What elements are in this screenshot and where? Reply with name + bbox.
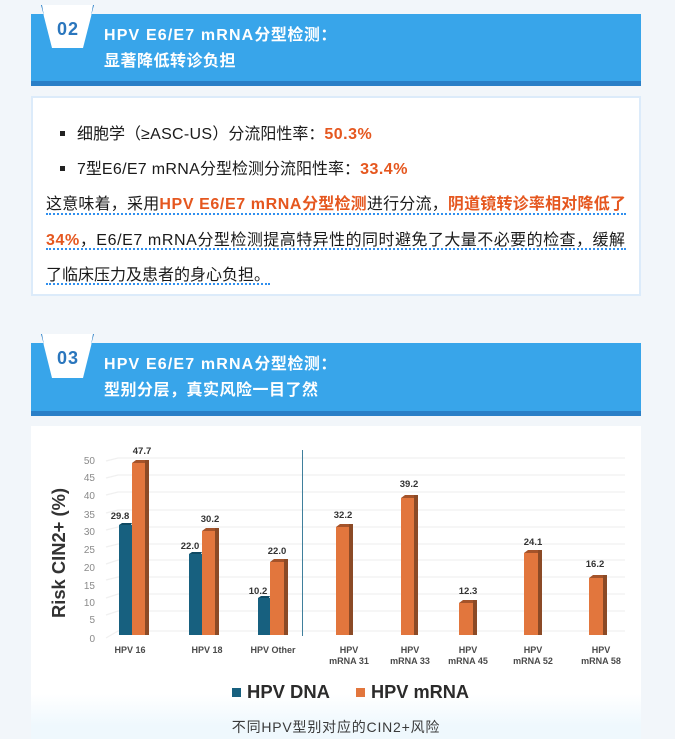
y axis ticks: 15 xyxy=(84,581,95,592)
category labels: HPV xyxy=(340,645,358,655)
value labels: 12.3 xyxy=(459,586,477,597)
legend xyxy=(232,682,469,702)
bullet: cytology positive rate: 细胞学（≥ASC-US）分流阳性率：50.3% xyxy=(77,126,372,143)
conclusion line 2: 34%，E6/E7 mRNA分型检测提高特异性的同时避免了大量不必要的检查，缓解 xyxy=(46,232,625,249)
heading line 1: HPV E6/E7 mRNA分型检测： xyxy=(104,27,337,44)
category labels: HPV xyxy=(401,645,419,655)
number tab xyxy=(41,5,94,48)
mRNA bars xyxy=(132,460,607,635)
value labels: 32.2 xyxy=(334,510,352,521)
value labels: 22.0 xyxy=(181,541,199,552)
bullet marker 1 xyxy=(60,131,65,136)
y axis ticks: 5 xyxy=(89,615,95,626)
bullet marker 2 xyxy=(60,166,65,171)
category labels: HPV xyxy=(459,645,477,655)
category labels: mRNA 31 xyxy=(329,656,369,666)
category labels xyxy=(114,645,621,666)
category labels: HPV 18 xyxy=(191,645,223,655)
category labels: mRNA 45 xyxy=(448,656,488,666)
chart caption: 不同HPV型别对应的CIN2+风险 xyxy=(232,719,440,735)
section header 02 xyxy=(31,14,641,86)
legend: HPV DNA xyxy=(247,682,330,702)
bar chart: risk of CIN2+ by HPV type xyxy=(49,446,625,702)
number tab xyxy=(41,334,94,378)
header bottom strip xyxy=(31,411,641,416)
y axis ticks: 25 xyxy=(84,545,95,556)
category labels: HPV xyxy=(592,645,610,655)
header bottom strip xyxy=(31,81,641,86)
y axis ticks: 10 xyxy=(84,598,95,609)
value labels: 22.0 xyxy=(268,546,286,557)
bullet: 7-type mRNA positive rate: 7型E6/E7 mRNA分型检测分流阳性率：33.4% xyxy=(77,161,408,178)
value labels: 24.1 xyxy=(524,537,543,548)
conclusion line 1: 这意味着，采用HPV E6/E7 mRNA分型检测进行分流，阴道镜转诊率相对降低了 xyxy=(46,196,626,213)
divider between DNA and mRNA groups xyxy=(302,450,304,636)
value labels: 47.7 xyxy=(133,446,151,457)
y axis ticks: 40 xyxy=(84,491,95,502)
value labels xyxy=(111,446,604,597)
value labels: 10.2 xyxy=(249,586,267,597)
section header 03 xyxy=(31,343,641,416)
category labels: HPV Other xyxy=(250,645,296,655)
section number 02: 02 xyxy=(57,19,79,39)
conclusion line 3: 了临床压力及患者的身心负担。 xyxy=(46,267,270,284)
category labels: mRNA 33 xyxy=(390,656,430,666)
y axis ticks: 50 xyxy=(84,456,95,467)
category labels: mRNA 52 xyxy=(513,656,553,666)
panel: triage results text xyxy=(31,96,641,296)
y axis ticks: 35 xyxy=(84,510,95,521)
value labels: 39.2 xyxy=(400,479,418,490)
heading line 1: HPV E6/E7 mRNA分型检测： xyxy=(104,356,337,373)
section number 03: 03 xyxy=(57,348,79,368)
y axis ticks xyxy=(84,456,95,645)
y axis ticks: 45 xyxy=(84,473,95,484)
category labels: HPV xyxy=(524,645,542,655)
category labels: mRNA 58 xyxy=(581,656,621,666)
DNA bars xyxy=(119,523,270,635)
heading line 2: 显著降低转诊负担 xyxy=(104,53,236,70)
value labels: 29.8 xyxy=(111,511,129,522)
y axis ticks: 20 xyxy=(84,563,95,574)
legend: HPV mRNA xyxy=(371,682,469,702)
y axis title: Risk CIN2+ (%) xyxy=(49,488,69,618)
panel: chart xyxy=(31,426,641,739)
category labels: HPV 16 xyxy=(114,645,146,655)
value labels: 16.2 xyxy=(586,559,604,570)
y axis ticks: 0 xyxy=(89,634,95,645)
heading line 2: 型别分层，真实风险一目了然 xyxy=(104,382,319,399)
value labels: 30.2 xyxy=(201,514,219,525)
y axis ticks: 30 xyxy=(84,527,95,538)
